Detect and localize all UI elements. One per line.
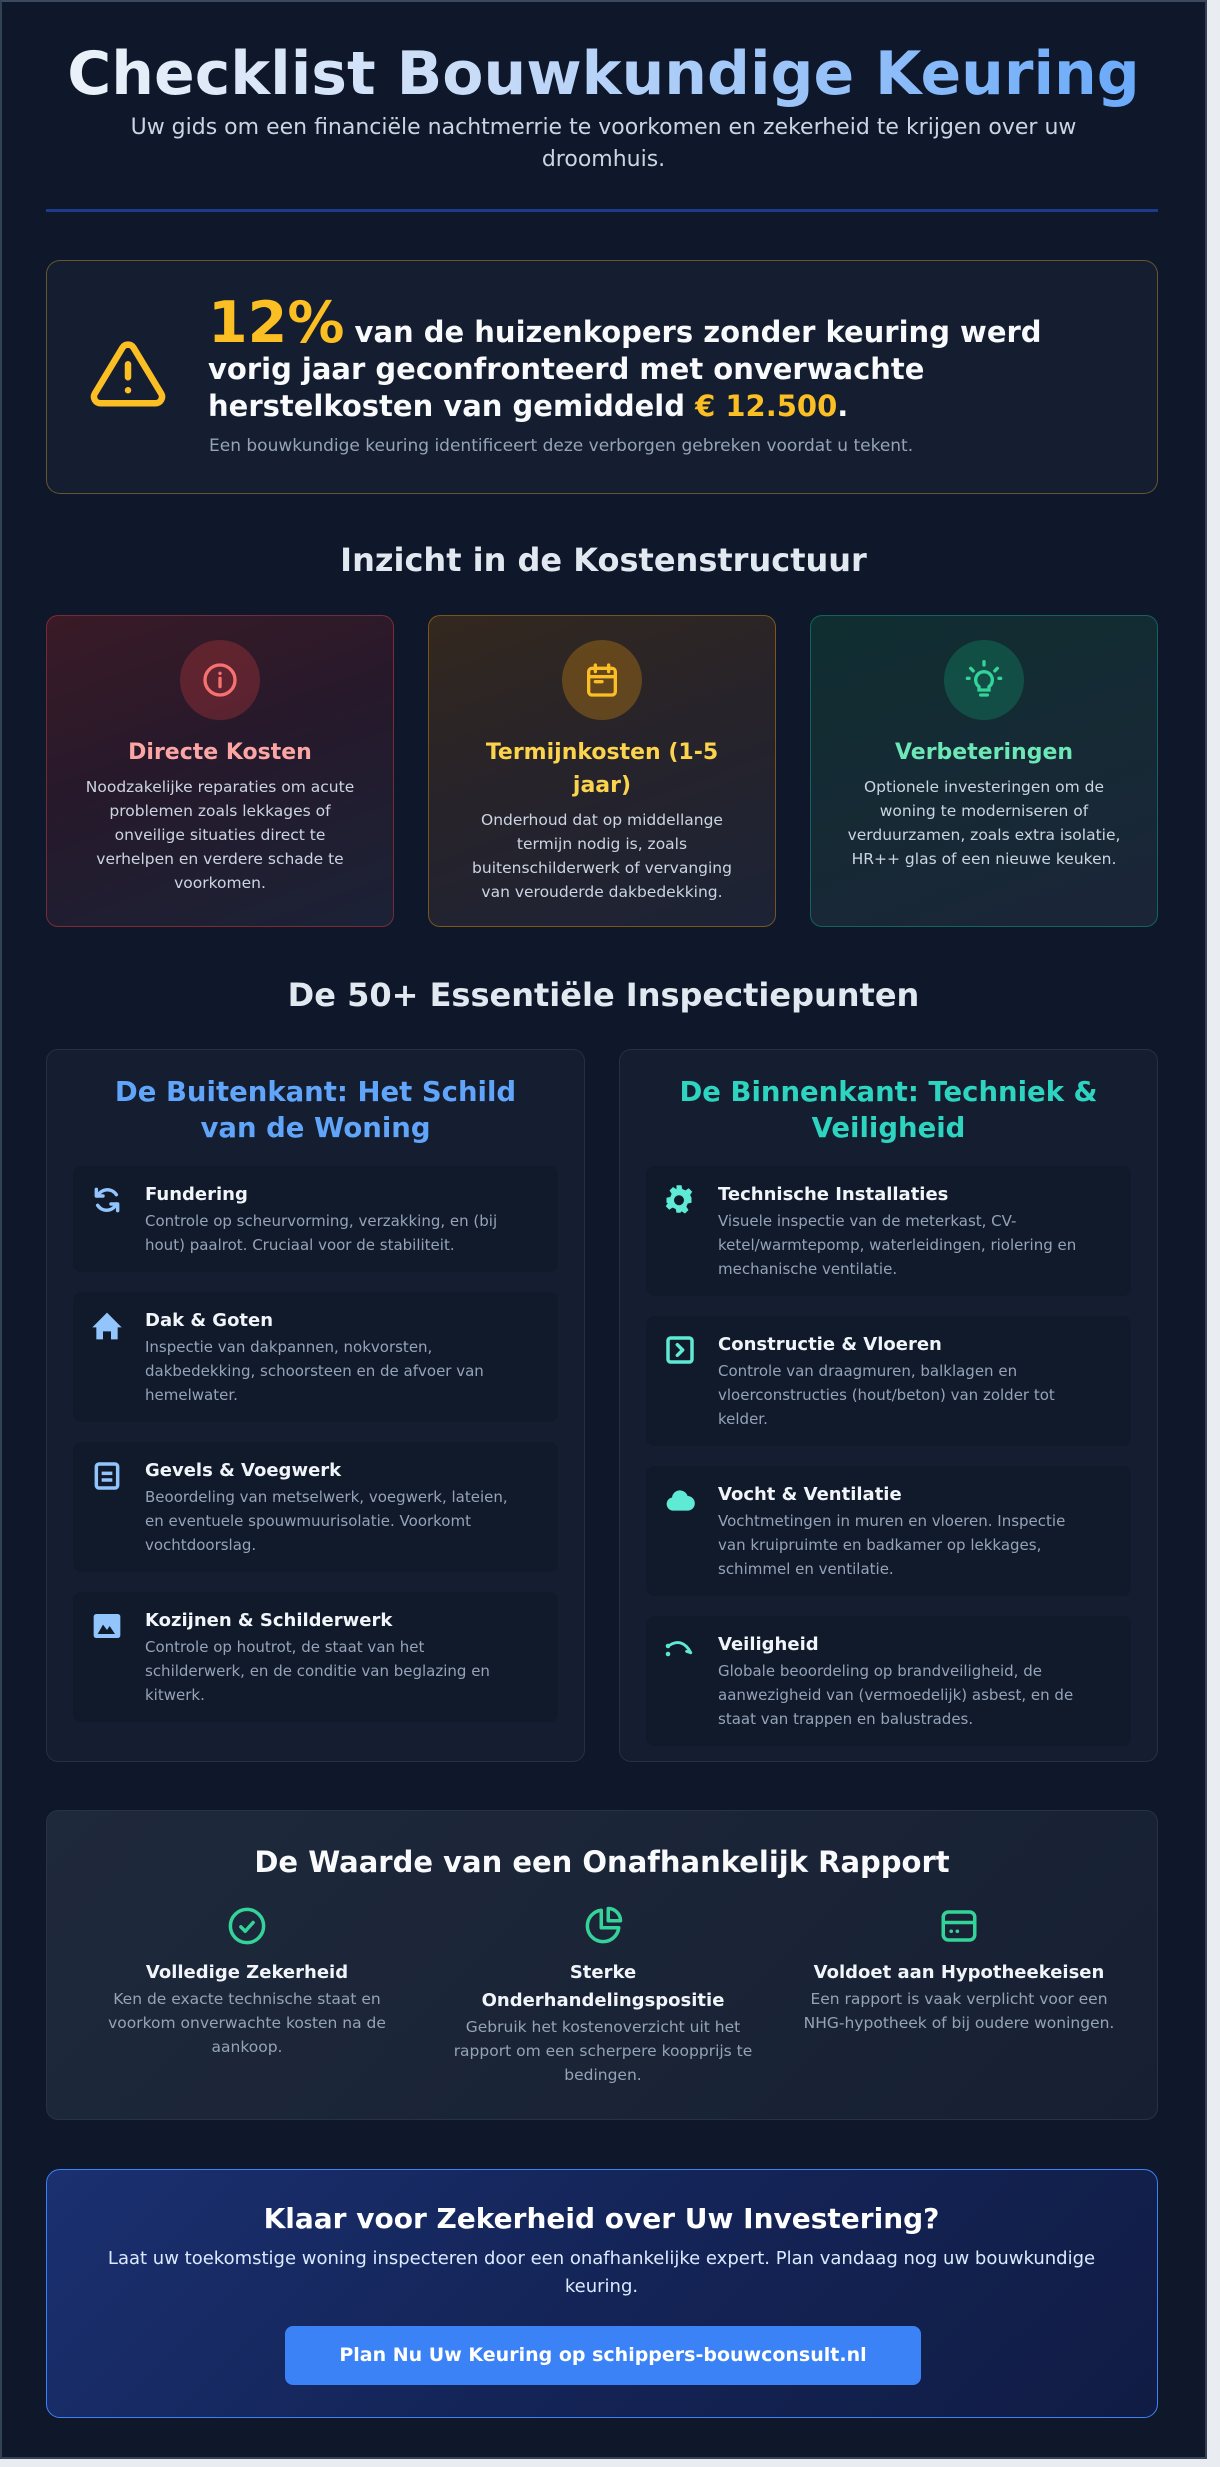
call to action: Laat uw toekomstige woning inspecteren door een onafhankelijke expert. Plan vandaag nog uw bouwkundige keuring. — [108, 2248, 1095, 2297]
card: directe kosten: Directe Kosten — [128, 740, 312, 765]
column: onderhandeling: Sterke Onderhandelingspositie — [482, 1962, 724, 2011]
call to action — [46, 2169, 1158, 2418]
column: hypotheek — [804, 1910, 1114, 2032]
statistic text: 12% van de huizenkopers zonder keuring werd vorig jaar geconfronteerd met onverwachte herstelkosten van gemiddeld € 12.500. — [208, 290, 1042, 423]
item: gevels: Beoordeling van metselwerk, voegwerk, lateien, en eventuele spouwmuurisolatie. Voorkomt vochtdoorslag. — [145, 1488, 508, 1554]
item: installaties: Visuele inspectie van de meterkast, CV-ketel/warmtepomp, waterleidingen, riolering en mechanische ventilatie. — [718, 1212, 1076, 1278]
item: constructie: Controle van draagmuren, balklagen en vloerconstructies (hout/beton) van zolder tot kelder. — [718, 1362, 1055, 1428]
card: directe kosten: Noodzakelijke reparaties om acute problemen zoals lekkages of onveilige situaties direct te verhelpen en verdere schade te voorkomen. — [86, 778, 354, 892]
icon: lightbulb — [944, 640, 1024, 720]
alert panel: statistic — [46, 260, 1158, 494]
column: hypotheek: Een rapport is vaak verplicht voor een NHG-hypotheek of bij oudere woningen. — [804, 1990, 1114, 2032]
heading: inspectiepunten: De 50+ Essentiële Inspectiepunten — [288, 976, 919, 1014]
item: veiligheid: Veiligheid — [718, 1634, 819, 1655]
card: verbeteringen: Verbeteringen — [895, 740, 1073, 765]
card: directe kosten — [46, 615, 394, 927]
subtitle: Uw gids om een financiële nachtmerrie te voorkomen en zekerheid te krijgen over uw droomhuis. — [131, 115, 1076, 172]
column: hypotheek: Voldoet aan Hypotheekeisen — [814, 1962, 1104, 1983]
item: veiligheid: Globale beoordeling op brandveiligheid, de aanwezigheid van (vermoedelijk) asbest, en de staat van trappen en balustrades. — [718, 1662, 1073, 1728]
icon: info — [180, 640, 260, 720]
card: verbeteringen — [810, 615, 1158, 927]
heading: kostenstructuur: Inzicht in de Kostenstructuur — [340, 541, 867, 579]
button — [285, 2326, 921, 2385]
note text: Een bouwkundige keuring identificeert deze verborgen gebreken voordat u tekent. — [209, 436, 913, 456]
item: kozijnen: Controle op houtrot, de staat van het schilderwerk, en de conditie van beglazing en kitwerk. — [145, 1638, 490, 1704]
panel: binnenkant — [619, 1049, 1158, 1762]
card: verbeteringen: Optionele investeringen om de woning te moderniseren of verduurzamen, zoals extra isolatie, HR++ glas of een nieuwe keuken. — [848, 778, 1120, 868]
item: fundering: Controle op scheurvorming, verzakking, en (bij hout) paalrot. Cruciaal voor de stabiliteit. — [145, 1212, 497, 1254]
column: zekerheid — [108, 1908, 386, 2056]
panel: waarde rapport: De Waarde van een Onafhankelijk Rapport — [254, 1845, 950, 1879]
panel: buitenkant — [46, 1049, 585, 1762]
item: veiligheid — [646, 1616, 1131, 1746]
item: constructie — [646, 1316, 1131, 1446]
card: termijnkosten — [428, 615, 776, 927]
panel: buitenkant: De Buitenkant: Het Schild van de Woning — [115, 1076, 516, 1144]
item: gevels: Gevels & Voegwerk — [145, 1460, 341, 1481]
icon: warning triangle — [90, 341, 166, 406]
item: gevels — [73, 1442, 558, 1572]
title: Checklist Bouwkundige Keuring — [67, 39, 1140, 109]
item: fundering: Fundering — [145, 1184, 248, 1205]
card: termijnkosten: Termijnkosten (1-5 jaar) — [486, 740, 718, 798]
item: kozijnen: Kozijnen & Schilderwerk — [145, 1610, 392, 1631]
item: dak: Dak & Goten — [145, 1310, 273, 1331]
item: vocht — [646, 1466, 1131, 1596]
column: onderhandeling — [454, 1906, 752, 2084]
panel: binnenkant: De Binnenkant: Techniek & Veiligheid — [679, 1076, 1098, 1144]
column: zekerheid: Volledige Zekerheid — [146, 1962, 348, 1983]
item: dak — [73, 1292, 558, 1422]
item: constructie: Constructie & Vloeren — [718, 1334, 942, 1355]
item: installaties — [646, 1166, 1131, 1296]
card: termijnkosten: Onderhoud dat op middellange termijn nodig is, zoals buitenschilderwerk of vervanging van verouderde dakbedekking. — [472, 811, 732, 901]
item: vocht: Vochtmetingen in muren en vloeren. Inspectie van kruipruimte en badkamer op lekkages, schimmel en ventilatie. — [718, 1512, 1065, 1578]
column: onderhandeling: Gebruik het kostenoverzicht uit het rapport om een scherpere koopprijs te bedingen. — [454, 2018, 752, 2084]
item: dak: Inspectie van dakpannen, nokvorsten, dakbedekking, schoorsteen en de afvoer van hemelwater. — [145, 1338, 484, 1404]
call to action: Klaar voor Zekerheid over Uw Investering? — [264, 2202, 939, 2235]
panel: waarde rapport — [46, 1810, 1158, 2120]
button: Plan Nu Uw Keuring op schippers-bouwconsult.nl — [339, 2344, 867, 2366]
item: fundering — [73, 1166, 558, 1272]
column: zekerheid: Ken de exacte technische staat en voorkom onverwachte kosten na de aankoop. — [108, 1990, 386, 2056]
item: kozijnen — [73, 1592, 558, 1722]
item: vocht: Vocht & Ventilatie — [718, 1484, 902, 1505]
item: installaties: Technische Installaties — [718, 1184, 948, 1205]
icon: calendar — [562, 640, 642, 720]
